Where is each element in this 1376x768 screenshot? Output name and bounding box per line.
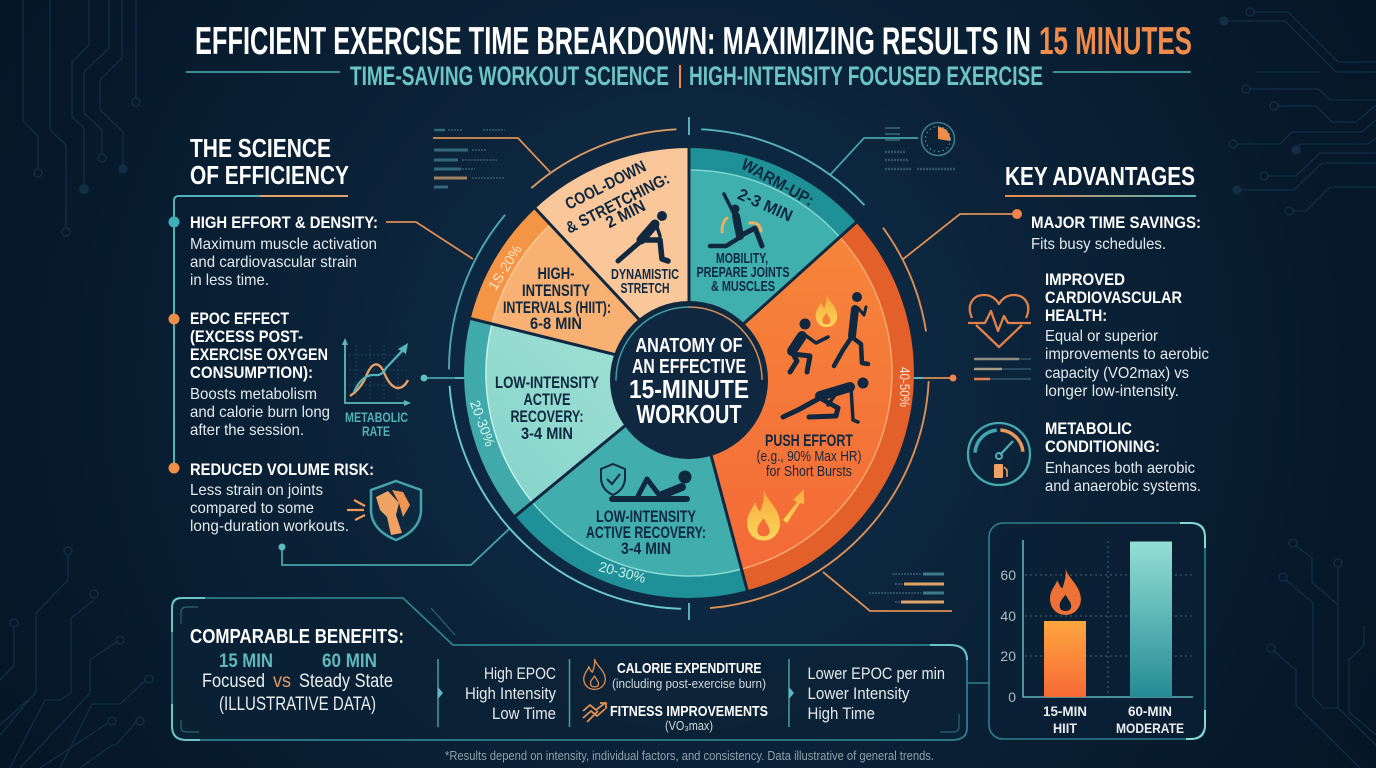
text block: major time savings: MAJOR TIME SAVINGS: [1031, 213, 1201, 232]
icon: stretching figure [618, 211, 668, 261]
wedge text: left recovery: LOW-INTENSITY [495, 374, 599, 392]
text block: reduced volume risk: REDUCED VOLUME RISK: [190, 460, 374, 479]
wedge text: cool-down: COOL-DOWN [562, 158, 649, 214]
icon: calorie flame [584, 659, 605, 689]
icon: chart flame [1050, 568, 1081, 615]
panel: the science of efficiency [168, 133, 421, 540]
HUD decoration: top left list [434, 130, 505, 187]
text block: 60-minute column: Lower Intensity [808, 684, 910, 703]
text block: reduced volume risk: long-duration workouts. [190, 518, 349, 535]
dividers with arrows [438, 659, 794, 727]
text block: 15-minute column [465, 664, 556, 723]
outer ring arcs around wheel [350, 30, 1028, 708]
connector lines to wheel [278, 138, 1022, 611]
wedge text: HIIT: HIGH- [538, 265, 574, 283]
text block: 15 vs 60 minutes: vs [273, 671, 291, 692]
wedge text: cool-down: 2 MIN [603, 197, 649, 232]
decorative circuit traces, top left [23, 0, 140, 236]
wedge text: left recovery: 3-4 MIN [521, 425, 573, 443]
text block: high effort: HIGH EFFORT & DENSITY: [190, 213, 378, 232]
HUD decoration: bottom right list [869, 574, 944, 602]
text block: calorie expenditure: (including post-exercise burn) [612, 676, 766, 691]
bar labels [1043, 703, 1184, 736]
wedge text: HIIT: 1S·20% [485, 242, 525, 293]
text block: reduced volume risk: compared to some [190, 500, 314, 517]
text block: EPOC effect: EXERCISE OXYGEN [190, 345, 328, 364]
heading: comparable benefits: COMPARABLE BENEFITS: [190, 625, 404, 648]
axis labels: 40 [1000, 608, 1016, 624]
wedge text: warm-up: & MUSCLES [711, 278, 775, 295]
wedge text: cool-down: STRETCH [620, 280, 670, 297]
text block: EPOC effect [190, 309, 330, 439]
grid lines [1025, 541, 1192, 697]
wedge text: push effort: PUSH EFFORT [765, 432, 853, 450]
hub: center title: 15-MINUTE [629, 374, 749, 404]
text block: EPOC effect: EPOC EFFECT [190, 309, 290, 328]
text block: fitness improvements: FITNESS IMPROVEMENTS [610, 703, 768, 720]
wedge: push effort [689, 222, 914, 590]
subtitle: HIGH-INTENSITY FOCUSED EXERCISE [689, 61, 1043, 91]
heading: the science of efficiency: THE SCIENCE [190, 133, 331, 163]
text block: high effort: in less time. [190, 272, 269, 289]
wedge text: warm-up: MOBILITY, [716, 250, 768, 267]
text block: 15 vs 60 minutes: 60 MIN [322, 651, 377, 672]
hub: center title: WORKOUT [636, 399, 742, 429]
bar labels: 15-MIN [1043, 703, 1087, 719]
axis labels [1000, 567, 1016, 705]
text block: 60-minute column: High Time [808, 704, 875, 723]
panel: key advantages [968, 161, 1209, 495]
text block: cardiovascular health: longer low-intensity. [1045, 383, 1179, 400]
text block: fitness improvements [610, 703, 768, 733]
wedge: HIIT [471, 208, 689, 373]
hub: center title [610, 301, 768, 459]
wedge text: HIIT: 6-8 MIN [530, 315, 582, 333]
text block: 60-minute column: Lower EPOC per min [808, 664, 945, 683]
wedge text: warm-up: PREPARE JOINTS [696, 264, 790, 281]
wedge text: HIIT: INTENSITY [522, 282, 590, 300]
text block: high effort [190, 213, 378, 289]
text block: metabolic conditioning: and anaerobic systems. [1045, 478, 1201, 495]
text block: 15 vs 60 minutes: Steady State [299, 671, 393, 692]
text block: cardiovascular health: IMPROVED [1045, 270, 1125, 289]
bar labels: HIIT [1053, 720, 1077, 736]
axis labels: 0 [1008, 689, 1016, 705]
heading: key advantages: KEY ADVANTAGES [1005, 161, 1195, 191]
subtitle: TIME-SAVING WORKOUT SCIENCE [350, 61, 669, 91]
text block: cardiovascular health: Equal or superior [1045, 328, 1159, 345]
icon: knee shield [347, 481, 421, 540]
wedge text: push effort: 40-50% [897, 367, 913, 407]
decorative circuit traces, top right [1220, 8, 1376, 215]
text block: metabolic conditioning: METABOLIC [1045, 419, 1132, 438]
bar chart: 15-min HIIT vs 60-min moderate [989, 523, 1205, 739]
text block: cardiovascular health [1045, 270, 1209, 400]
text block: 15-minute column: Low Time [492, 704, 556, 723]
icon: fitness trend arrows [583, 703, 606, 722]
text block: metabolic conditioning [1045, 419, 1201, 495]
wedge text: left recovery: 20·30% [467, 398, 498, 449]
text block: reduced volume risk [190, 460, 374, 535]
text block: cardiovascular health: improvements to aerobic [1045, 346, 1209, 363]
text block: calorie expenditure: CALORIE EXPENDITURE [617, 660, 762, 677]
wedge text: warm-up: 2-3 MIN [735, 185, 795, 225]
bar: 15-min HIIT [1044, 621, 1086, 697]
HUD decoration: top right clock [885, 122, 955, 169]
text block: EPOC effect: Boosts metabolism [190, 386, 317, 403]
axis labels: 20 [1000, 648, 1016, 664]
wedge text: push effort: (e.g., 90% Max HR) [756, 449, 862, 465]
axis labels: 60 [1000, 567, 1016, 583]
wedge text: bottom recovery [586, 508, 706, 586]
icon: heart with pulse [968, 295, 1031, 347]
text block: 15-minute column: High Intensity [465, 684, 556, 703]
icon: warm-up lunge figure [710, 194, 762, 246]
chart: workout wheel [464, 146, 914, 598]
wedge: low-intensity recovery bottom [515, 373, 747, 598]
wedge text: bottom recovery: ACTIVE RECOVERY: [586, 524, 706, 542]
title: 15 MINUTES [1039, 20, 1192, 63]
text block: 15 vs 60 minutes: 15 MIN [219, 651, 273, 672]
icon: gauge with fuel pump [968, 423, 1030, 485]
text block: EPOC effect: CONSUMPTION): [190, 363, 313, 382]
panel: comparable benefits [172, 598, 989, 740]
wedge text: left recovery: ACTIVE [524, 391, 570, 409]
wedge text: cool-down [562, 158, 679, 297]
text block: metabolic conditioning: CONDITIONING: [1045, 437, 1160, 456]
wedge text: warm-up [696, 155, 817, 295]
text block: high effort: Maximum muscle activation [190, 236, 377, 253]
icon: metabolic rate chart [342, 338, 411, 439]
wedge text: bottom recovery: 20-30% [597, 558, 648, 586]
icon: shield check [601, 464, 625, 495]
icon: metabolic rate chart: RATE [362, 424, 390, 439]
bar: 60-min moderate [1130, 542, 1172, 697]
text block: cardiovascular health: CARDIOVASCULAR [1045, 288, 1182, 307]
text block: EPOC effect: (EXCESS POST- [190, 327, 303, 346]
text block: calorie expenditure [612, 660, 766, 691]
axes [1023, 540, 1193, 697]
hub: center title: ANATOMY OF [636, 335, 742, 357]
text block: high effort: and cardiovascular strain [190, 254, 357, 271]
text block: 15 vs 60 minutes: Focused [202, 671, 265, 692]
bar labels: MODERATE [1116, 720, 1184, 736]
timeline rail [168, 196, 348, 474]
wedge text: cool-down: & STRETCHING: [563, 170, 673, 237]
heading: the science of efficiency [190, 133, 349, 190]
text block: cardiovascular health: capacity (VO2max) vs [1045, 365, 1189, 382]
text block: 15 vs 60 minutes [202, 651, 393, 715]
subtitle [186, 61, 1191, 91]
wedge text: push effort [756, 367, 913, 480]
icon: metabolic rate chart: METABOLIC [345, 410, 408, 425]
wedge text: push effort: for Short Bursts [766, 464, 852, 480]
text block: reduced volume risk: Less strain on joints [190, 482, 323, 499]
wedge separators [469, 146, 858, 592]
hub: center title: AN EFFECTIVE [632, 356, 746, 378]
text block: cardiovascular health: HEALTH: [1045, 306, 1107, 325]
wedge: cool-down [536, 148, 689, 373]
decorative circuit traces, bottom left [0, 547, 153, 768]
wedge text: left recovery: RECOVERY: [510, 408, 584, 426]
text block: major time savings: Fits busy schedules. [1031, 236, 1166, 253]
icon: lying figure [612, 470, 692, 499]
text block: major time savings [1031, 213, 1201, 253]
wedge text: bottom recovery: LOW-INTENSITY [596, 508, 696, 526]
bar labels: 60-MIN [1128, 703, 1172, 719]
wedge text: cool-down: DYNAMISTIC [611, 266, 679, 283]
wedge text: warm-up: WARM-UP: [738, 155, 817, 210]
text block: metabolic conditioning: Enhances both aerobic [1045, 460, 1195, 477]
wedge: low-intensity recovery left [464, 319, 689, 516]
text block: 15-minute column: High EPOC [484, 664, 556, 683]
text block: 60-minute column [808, 664, 945, 723]
text block: 15 vs 60 minutes: (ILLUSTRATIVE DATA) [219, 694, 376, 715]
icon: small progress bars [974, 359, 1031, 379]
wedge text: HIIT: INTERVALS (HIIT): [503, 299, 611, 317]
wedge text: bottom recovery: 3-4 MIN [621, 540, 671, 558]
wedge: warm-up [689, 148, 856, 373]
heading: the science of efficiency: OF EFFICIENCY [190, 160, 349, 190]
footnote: *Results depend on intensity, individual factors, and consistency. Data illustrative of general trends. [445, 749, 934, 763]
icon: flames and arrow [747, 294, 837, 541]
wedge text: HIIT [485, 242, 611, 333]
text block: EPOC effect: and calorie burn long [190, 404, 330, 421]
text block: fitness improvements: (VO₃max) [665, 718, 713, 733]
icon: exercise figures [783, 292, 868, 422]
text block: EPOC effect: after the session. [190, 422, 304, 439]
decorative circuit traces, bottom right [1267, 539, 1376, 768]
wedge text: left recovery [467, 374, 599, 449]
